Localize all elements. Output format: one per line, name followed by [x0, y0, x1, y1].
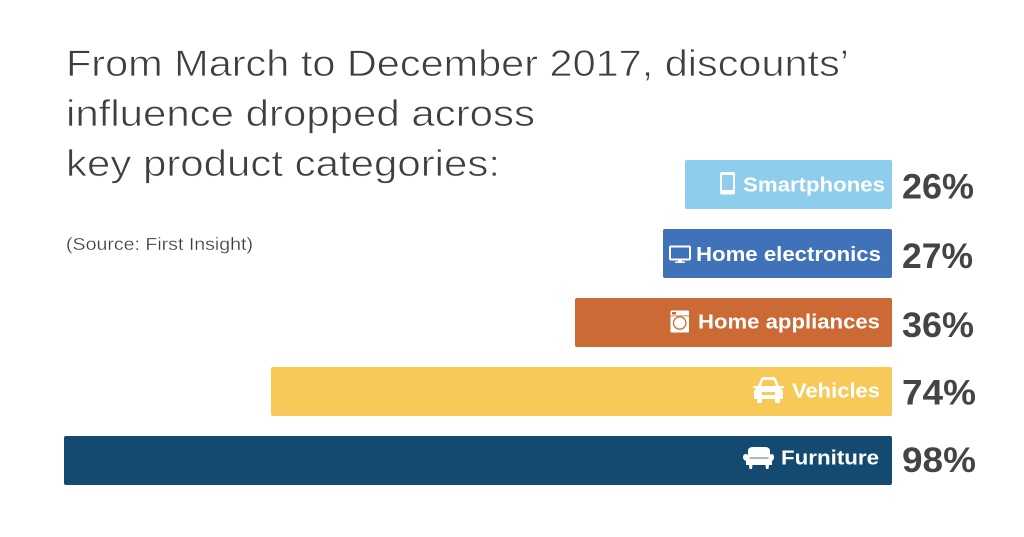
icon: washing machine	[670, 310, 689, 332]
value: smartphones: 26%	[902, 166, 974, 206]
bar: furniture: Furniture	[781, 446, 879, 470]
icon: car	[753, 377, 784, 403]
bar: home electronics: Home electronics	[696, 243, 881, 266]
bar: smartphones	[685, 160, 892, 209]
icon: sofa	[743, 447, 774, 469]
bar: home electronics	[663, 229, 892, 278]
bar: vehicles	[271, 367, 892, 416]
bar: home appliances	[575, 298, 892, 347]
source note: (Source: First Insight)	[66, 234, 253, 254]
icon: television	[670, 246, 690, 263]
title: From March to December 2017, discounts’	[66, 43, 849, 84]
icon: smartphone	[720, 172, 735, 194]
bar: smartphones: Smartphones	[743, 174, 885, 196]
bar: home appliances: Home appliances	[698, 310, 880, 334]
value: furniture: 98%	[902, 440, 976, 480]
bar: furniture	[64, 436, 892, 485]
bar: vehicles: Vehicles	[792, 380, 880, 402]
value: home appliances: 36%	[902, 305, 974, 345]
title: influence dropped across	[66, 93, 535, 134]
title: key product categories:	[66, 143, 500, 184]
value: home electronics: 27%	[902, 236, 973, 276]
title	[66, 43, 849, 184]
bar chart	[64, 160, 976, 485]
value: vehicles: 74%	[902, 372, 976, 412]
